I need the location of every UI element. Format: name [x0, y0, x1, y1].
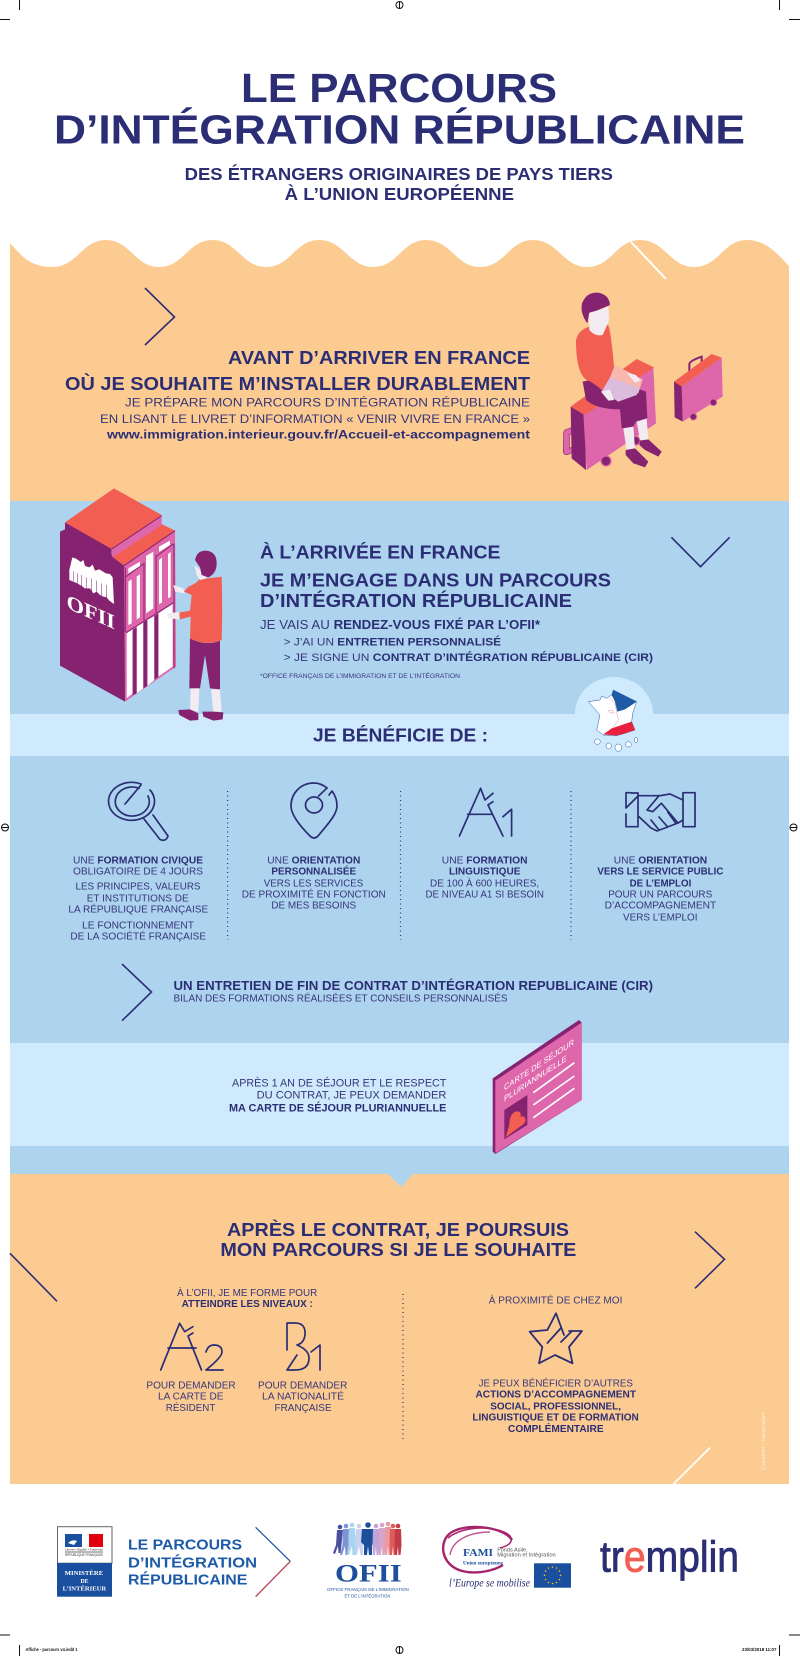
logo: tremplin: tremplin — [600, 1533, 739, 1582]
text block: livret: JE PRÉPARE MON PARCOURS D’INTÉGRATION RÉPUBLICAINE — [125, 394, 530, 410]
text: A2 caption — [146, 1380, 236, 1414]
heading: avant d'arriver: AVANT D’ARRIVER EN FRANCE — [228, 347, 530, 368]
text: entretien de fin de contrat: UN ENTRETIEN DE FIN DE CONTRAT D’INTÉGRATION REPUBLICAINE (CIR) — [174, 978, 653, 993]
illustration: OFII building and person: OFII — [67, 590, 115, 634]
text block: rendez-vous: > J’AI UN ENTRETIEN PERSONNALISÉ — [284, 636, 501, 649]
text: autres actions: COMPLÉMENTAIRE — [508, 1422, 604, 1435]
icon: A1 level — [459, 788, 512, 836]
heading: après le contrat: MON PARCOURS SI JE LE SOUHAITE — [220, 1239, 576, 1260]
text: formation civique: LA RÉPUBLIQUE FRANÇAISE — [68, 902, 208, 915]
heading: à l'arrivée: À L’ARRIVÉE EN FRANCE — [260, 542, 500, 563]
text block: livret: EN LISANT LE LIVRET D’INFORMATION « VENIR VIVRE EN FRANCE » — [100, 412, 530, 426]
panel: je bénéficie de — services — [10, 756, 789, 1043]
text: orientation emploi — [597, 855, 724, 923]
text: formation linguistique: DE NIVEAU A1 SI BESOIN — [426, 889, 544, 900]
logo: OFII: OFII — [335, 1561, 402, 1588]
text: orientation emploi: VERS L’EMPLOI — [623, 912, 698, 923]
title — [54, 65, 745, 152]
text: à l'OFII — [177, 1286, 317, 1310]
text block: rendez-vous: > JE SIGNE UN CONTRAT D’INTÉGRATION RÉPUBLICAINE (CIR) — [284, 651, 653, 664]
logo: ministère de l'intérieur: DE — [80, 1578, 88, 1585]
logo: ministère de l'intérieur: MINISTÈRE — [65, 1569, 103, 1577]
text: orientation personnalisée: UNE ORIENTATION — [267, 855, 360, 866]
heading: à l'arrivée: D’INTÉGRATION RÉPUBLICAINE — [260, 590, 572, 611]
panel: à l'arrivée en France — [10, 488, 789, 756]
text: formation linguistique: LINGUISTIQUE — [449, 866, 521, 877]
logo: ministère de l'intérieur: L’INTÉRIEUR — [63, 1585, 107, 1593]
heading: avant d'arriver — [65, 347, 531, 394]
panel: carte de séjour — [10, 1020, 789, 1174]
band: je bénéficie de — [10, 714, 789, 756]
text: orientation personnalisée: DE MES BESOINS — [271, 900, 356, 911]
text: B1 caption — [258, 1380, 347, 1414]
logo: ministère de l'intérieur: RÉPUBLIQUE FRANÇAISE — [65, 1552, 103, 1557]
heading: avant d'arriver: OÙ JE SOUHAITE M’INSTALLER DURABLEMENT — [65, 373, 531, 394]
text: B1 caption: FRANÇAISE — [274, 1403, 332, 1414]
logo: le parcours d'intégration républicaine — [128, 1527, 290, 1597]
text: orientation emploi: UNE ORIENTATION — [614, 855, 707, 866]
text: formation civique: OBLIGATOIRE DE 4 JOURS — [73, 866, 203, 877]
text: formation civique: ET INSTITUTIONS DE — [87, 893, 189, 904]
text: A2 caption: RÉSIDENT — [166, 1401, 215, 1414]
text: entretien de fin de contrat: BILAN DES FORMATIONS RÉALISÉES ET CONSEILS PERSONNALISÉS — [174, 994, 508, 1005]
connector triangle — [388, 1174, 413, 1187]
text: à l'OFII: À L’OFII, JE ME FORME POUR — [177, 1286, 317, 1299]
icon: handshake — [626, 793, 695, 831]
logo: le parcours d'intégration républicaine: RÉPUBLICAINE — [128, 1571, 247, 1588]
illustration: residence card: CARTE DE SÉJOUR — [504, 1037, 574, 1092]
arrow: chevron right — [145, 288, 174, 345]
decorative white stroke — [631, 242, 666, 279]
text: A2 caption: LA CARTE DE — [158, 1391, 224, 1402]
subtitle — [185, 163, 613, 204]
text: formation linguistique: UNE FORMATION — [442, 855, 528, 866]
logo: ministère de l'intérieur — [57, 1527, 112, 1597]
text: autres actions: LINGUISTIQUE ET DE FORMATION — [472, 1412, 639, 1423]
text block: rendez-vous — [260, 617, 653, 680]
text: à l'OFII: ATTEINDRE LES NIVEAUX : — [182, 1299, 313, 1310]
logo: FAMI: Fonds Asile, — [497, 1548, 528, 1554]
logo: FAMI — [443, 1527, 571, 1590]
dome behind the map — [575, 677, 653, 714]
heading: après le contrat: APRÈS LE CONTRAT, JE POURSUIS — [227, 1219, 569, 1240]
print slug left: Affiche - parcours v4.indd 1 — [26, 1647, 78, 1652]
subtitle: À L’UNION EUROPÉENNE — [285, 183, 514, 204]
icon: map of France — [588, 690, 638, 751]
text: orientation personnalisée — [242, 855, 386, 911]
text block: rendez-vous: *OFFICE FRANÇAIS DE L’IMMIGRATION ET DE L’INTÉGRATION — [260, 673, 460, 680]
text: orientation emploi: DE L’EMPLOI — [630, 878, 691, 889]
heading: après le contrat — [220, 1219, 576, 1260]
text: autres actions — [472, 1376, 639, 1435]
illustration: residence card — [493, 1020, 582, 1154]
text: carte de séjour: APRÈS 1 AN DE SÉJOUR ET LE RESPECT — [232, 1077, 447, 1090]
panel: après le contrat — [10, 1174, 789, 1484]
logo: FAMI: FAMI — [463, 1547, 493, 1559]
logo: ministère de l'intérieur: Liberté • Égalité • Fraternité — [65, 1546, 103, 1552]
logo: FAMI: Union européenne — [463, 1561, 504, 1566]
text: orientation emploi: POUR UN PARCOURS — [608, 889, 712, 900]
text: autres actions: ACTIONS D’ACCOMPAGNEMENT — [476, 1389, 636, 1400]
text: formation civique: UNE FORMATION CIVIQUE — [73, 855, 203, 866]
text: formation linguistique: DE 100 À 600 HEURES, — [430, 876, 539, 889]
text block: livret — [100, 394, 530, 442]
panel: avant d'arriver en France — [10, 240, 789, 501]
text: carte de séjour: DU CONTRAT, JE PEUX DEMANDER — [257, 1090, 447, 1102]
icon: magnifier — [109, 782, 168, 840]
print slug right: 23/03/2018 11:07 — [742, 1647, 777, 1652]
logo: OFII: OFFICE FRANÇAIS DE L’IMMIGRATION — [327, 1587, 409, 1592]
credit: Création : tanguidam — [761, 1412, 767, 1470]
text: A2 caption: POUR DEMANDER — [146, 1380, 236, 1391]
logo: le parcours d'intégration républicaine: LE PARCOURS — [128, 1536, 242, 1553]
text: formation linguistique — [426, 855, 544, 900]
heading: je bénéficie de: JE BÉNÉFICIE DE : — [313, 725, 488, 746]
text: B1 caption: LA NATIONALITÉ — [262, 1389, 344, 1402]
title: LE PARCOURS — [241, 65, 557, 111]
arrow: chevron right — [122, 964, 152, 1021]
arrow: chevron right — [695, 1232, 724, 1288]
arrow: chevron down — [671, 537, 730, 567]
text: à proximité: À PROXIMITÉ DE CHEZ MOI — [489, 1293, 622, 1306]
text: orientation emploi: VERS LE SERVICE PUBLIC — [597, 866, 724, 877]
text: autres actions: SOCIAL, PROFESSIONNEL, — [490, 1401, 621, 1412]
text: entretien de fin de contrat — [174, 978, 653, 1005]
icon: B1 level — [287, 1323, 320, 1370]
logo: le parcours d'intégration républicaine: D’INTÉGRATION — [128, 1554, 257, 1571]
text: B1 caption: POUR DEMANDER — [258, 1380, 347, 1391]
subtitle: DES ÉTRANGERS ORIGINAIRES DE PAYS TIERS — [185, 163, 613, 184]
heading: à l'arrivée: JE M’ENGAGE DANS UN PARCOURS — [260, 570, 611, 591]
logo: OFII: ET DE L’INTÉGRATION — [344, 1592, 390, 1598]
text: autres actions: JE PEUX BÉNÉFICIER D’AUTRES — [479, 1376, 633, 1389]
illustration: residence card: PLURIANNUELLE — [504, 1053, 567, 1104]
text: formation civique: LES PRINCIPES, VALEURS — [76, 881, 201, 892]
heading: à l'arrivée — [260, 542, 611, 611]
text: formation civique — [68, 855, 208, 942]
illustration: OFII building and person — [60, 488, 223, 721]
text block: rendez-vous: JE VAIS AU RENDEZ-VOUS FIXÉ PAR L’OFII* — [260, 617, 540, 632]
logo: FAMI: Migration et Intégration — [497, 1553, 556, 1559]
icon: star — [530, 1313, 582, 1363]
illustration: traveller on suitcase — [563, 293, 723, 470]
text block: livret: www.immigration.interieur.gouv.fr/Accueil-et-accompagnement — [106, 428, 530, 442]
icon: map pin — [291, 783, 337, 838]
logo: OFII — [327, 1522, 409, 1598]
text: orientation emploi: D’ACCOMPAGNEMENT — [605, 900, 717, 911]
text: orientation personnalisée: PERSONNALISÉE — [271, 864, 356, 877]
text: formation civique: LE FONCTIONNEMENT — [82, 920, 195, 931]
logo: FAMI: l’Europe se mobilise — [449, 1576, 531, 1590]
text: formation civique: DE LA SOCIÉTÉ FRANÇAISE — [70, 929, 206, 942]
text: carte de séjour — [229, 1077, 447, 1115]
title: D’INTÉGRATION RÉPUBLICAINE — [54, 106, 745, 152]
text: orientation personnalisée: DE PROXIMITÉ EN FONCTION — [242, 887, 386, 900]
text: carte de séjour: MA CARTE DE SÉJOUR PLURIANNUELLE — [229, 1102, 446, 1115]
text: orientation personnalisée: VERS LES SERVICES — [264, 878, 363, 889]
icon: A2 level — [161, 1323, 223, 1370]
